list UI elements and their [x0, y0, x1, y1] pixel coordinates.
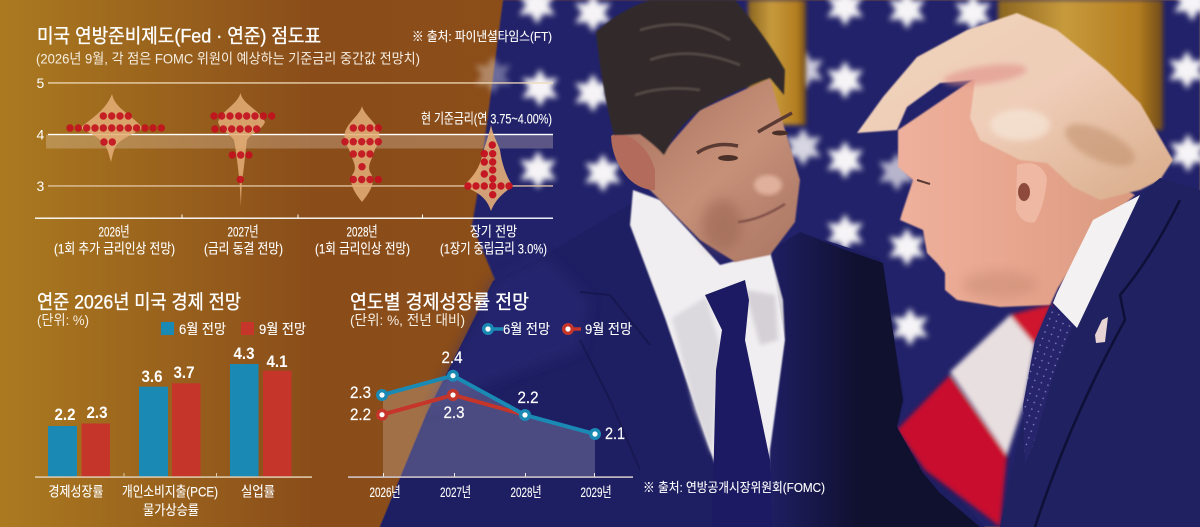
gridlines and y axis labels: 3 — [36, 178, 44, 194]
person: left man's dark sleeve — [770, 232, 980, 527]
flag backdrop: navy with stars — [380, 0, 1200, 527]
x labels: 2027: 2027년 — [228, 224, 258, 240]
bars: PCE inflation — [139, 364, 200, 477]
title: bar chart: 연준 2026년 미국 경제 전망 — [37, 292, 241, 314]
subtitle: bar chart: (단위: %) — [37, 312, 89, 328]
violin and dots: 2027 — [210, 93, 275, 207]
x axis: line chart: 2028년 — [510, 484, 542, 500]
x labels: 2026: 2026년 — [98, 224, 130, 240]
panel: bar chart — [35, 292, 312, 518]
title: dot plot: 미국 연방준비제도(Fed · 연준) 점도표 — [37, 26, 321, 48]
person: left man's tie — [705, 280, 772, 527]
panel: dot plot — [35, 26, 553, 256]
bars: GDP growth: 2.3 — [86, 404, 108, 422]
source: FOMC: ※ 출처: 연방공개시장위원회(FOMC) — [643, 480, 825, 495]
bars: unemployment: 4.3 — [234, 345, 254, 363]
gridlines and y axis labels: 4 — [36, 126, 44, 142]
title: line chart: 연도별 경제성장률 전망 — [350, 292, 529, 314]
category labels: bar chart: 실업률 — [241, 484, 275, 500]
category labels: bar chart: 경제성장률 — [48, 484, 104, 500]
x axis: line chart: 2026년 — [370, 484, 400, 500]
gridlines and y axis labels: 5 — [36, 75, 44, 91]
bars: unemployment — [230, 345, 292, 477]
violin and dots: 2028 — [341, 106, 382, 202]
value labels: line chart: 2.2 — [518, 389, 538, 407]
x labels: 2026 — [54, 224, 175, 256]
value labels: line chart: 2.2 — [350, 406, 371, 424]
flag: blurred red and white stripes — [897, 304, 1052, 527]
legend: bar chart — [161, 321, 306, 337]
line: September forecast — [378, 391, 525, 419]
source: Financial Times: ※ 출처: 파이낸셜타임스(FT) — [412, 29, 552, 44]
value labels: line chart: 2.4 — [442, 349, 462, 367]
x labels: long term: (1장기 중립금리 3.0%) — [440, 240, 547, 256]
person: left man's head — [596, 0, 800, 262]
person: left man's shirt and collar — [630, 190, 785, 500]
value labels: line chart: 2.3 — [350, 384, 371, 402]
x axis: dot plot — [35, 214, 553, 219]
x labels: 2028: (1회 금리인상 전망) — [315, 240, 410, 256]
violin and dots: 2026 — [66, 94, 165, 162]
person: right man's collar — [1053, 195, 1140, 328]
legend: line chart — [484, 321, 632, 337]
x axis: line chart: 2027년 — [440, 484, 471, 500]
bars: PCE inflation: 3.6 — [142, 368, 162, 386]
legend: bar chart: 6월 전망 — [179, 321, 226, 337]
legend: bar chart: 9월 전망 — [259, 321, 306, 337]
legend: line chart: 6월 전망 — [503, 321, 550, 337]
bars: GDP growth — [48, 404, 110, 477]
value labels: line chart: 2.1 — [605, 425, 625, 443]
x axis: line chart — [348, 473, 633, 500]
person: right man's dotted tie — [1023, 305, 1073, 465]
x axis: line chart: 2029년 — [580, 484, 612, 500]
area under line — [383, 376, 595, 477]
x labels: 2028 — [315, 224, 410, 256]
legend: line chart: 9월 전망 — [585, 321, 632, 337]
person: left man's suit — [380, 203, 985, 527]
gridlines and y axis labels — [36, 75, 553, 194]
x labels: 2027: (금리 동결 전망) — [204, 240, 283, 256]
category labels: bar chart — [48, 484, 275, 518]
x axis: bar chart — [35, 473, 312, 478]
bars: unemployment: 4.1 — [266, 353, 288, 371]
subtitle: dot plot: (2026년 9월, 각 점은 FOMC 위원이 예상하는 기준금리 중간값 전망치) — [36, 50, 420, 66]
person: right man's suit — [1000, 178, 1200, 527]
category labels: bar chart: 개인소비지출(PCE) — [122, 484, 218, 500]
subtitle: line chart: (단위: %, 전년 대비) — [350, 312, 465, 328]
line: June forecast — [378, 371, 599, 438]
label: current rate: 현 기준금리(연 3.75~4.00%) — [421, 110, 552, 126]
x labels: 2027 — [204, 224, 283, 256]
person: right man's head and hair — [857, 13, 1173, 307]
x labels: long term: 장기 전망 — [470, 224, 517, 240]
person: left man's dark hair — [596, 0, 785, 155]
bars: GDP growth: 2.2 — [54, 406, 76, 424]
x labels: 2026: (1회 추가 금리인상 전망) — [54, 240, 175, 256]
photo: two men in front of US flag — [380, 0, 1200, 527]
category labels: bar chart: 물가상승률 — [143, 502, 199, 518]
icon: flag lapel pin — [1095, 317, 1108, 343]
value labels: line chart — [350, 349, 625, 443]
value labels: line chart: 2.3 — [444, 404, 464, 422]
band: current rate range — [46, 134, 553, 148]
bars: PCE inflation: 3.7 — [174, 364, 194, 382]
violin and dots: long term — [463, 125, 513, 211]
x labels: long term — [440, 224, 547, 256]
panel: line chart — [348, 292, 825, 500]
gold drapery columns — [748, 0, 806, 125]
x labels: 2028: 2028년 — [346, 224, 378, 240]
